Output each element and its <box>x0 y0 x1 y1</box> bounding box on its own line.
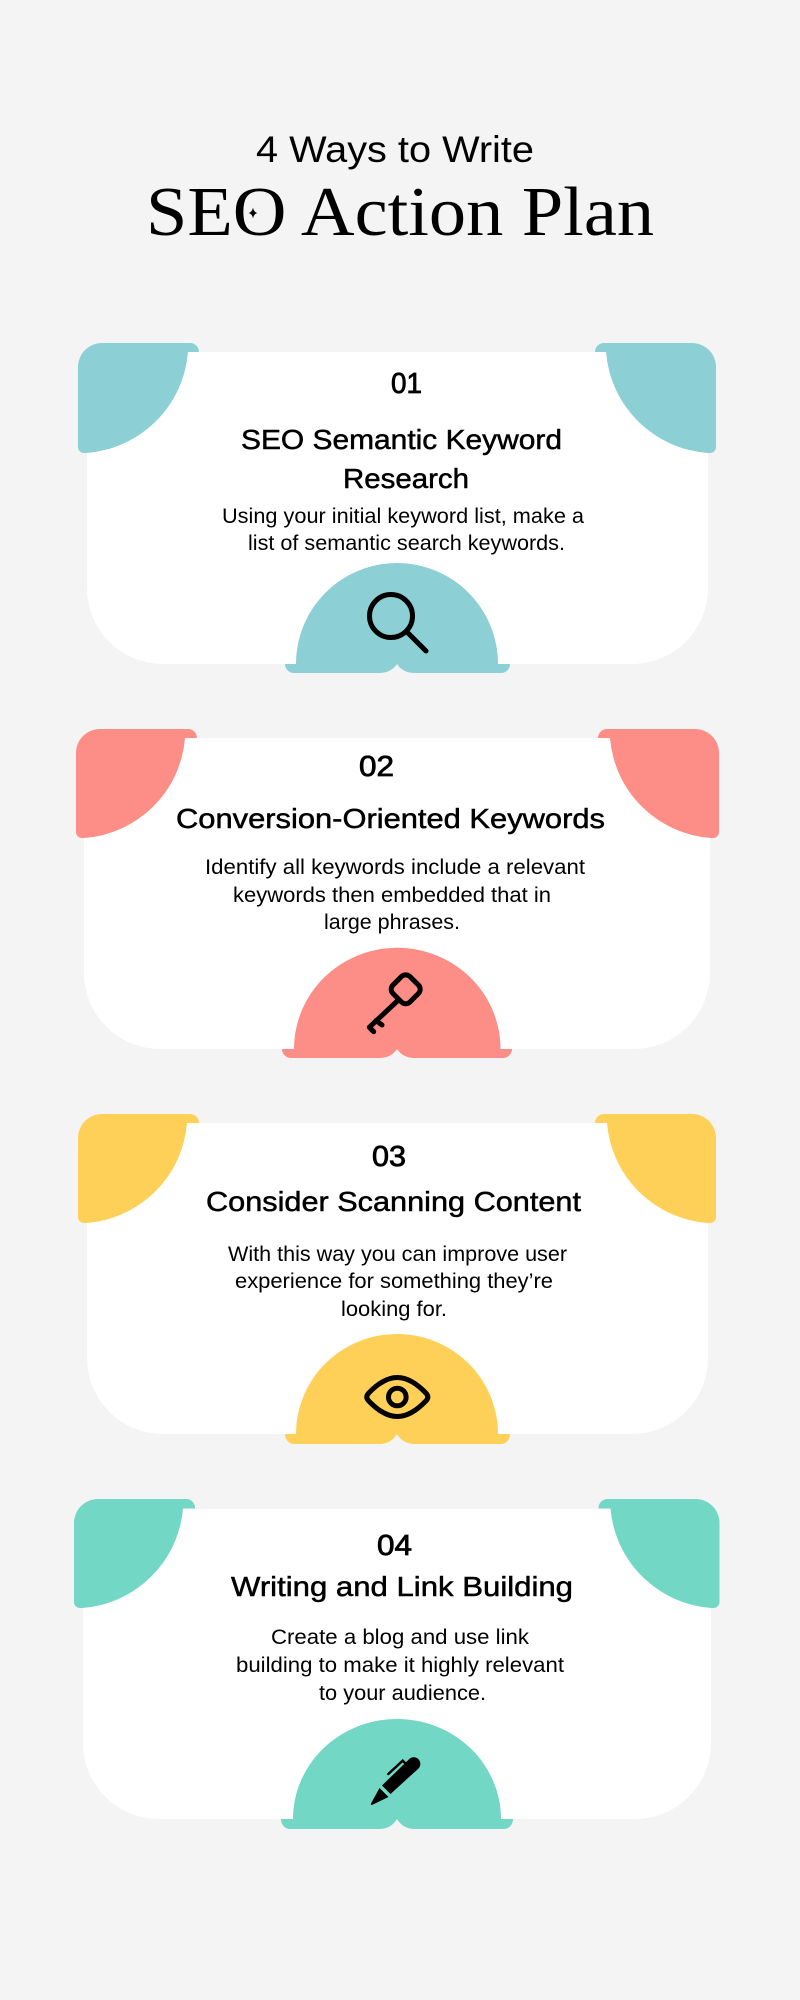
description: looking for. <box>341 1297 447 1321</box>
heading: Research <box>343 463 469 494</box>
icon: eye <box>367 1378 428 1416</box>
icon: sparkle inside the letter O <box>248 208 258 218</box>
description: experience for something they’re <box>235 1269 553 1293</box>
top-left corner accent <box>74 1499 195 1608</box>
card background <box>84 738 710 1049</box>
title block <box>146 129 654 251</box>
semicircle badge <box>282 948 512 1058</box>
description: Using your initial keyword list, make a <box>222 504 584 528</box>
description <box>205 855 585 934</box>
heading: Writing and Link Building <box>231 1571 573 1602</box>
panel: step 02 Conversion-Oriented Keywords <box>76 729 719 1058</box>
heading: SEO Semantic Keyword <box>241 424 562 455</box>
step number: 04 <box>377 1530 412 1562</box>
step number: 02 <box>359 751 394 783</box>
top-left corner accent <box>76 729 197 838</box>
top-right corner accent <box>595 1114 716 1223</box>
description <box>228 1242 567 1321</box>
icon: key <box>369 972 423 1032</box>
panel: step 04 Writing and Link Building <box>74 1499 720 1829</box>
description: With this way you can improve user <box>228 1242 567 1266</box>
main title: SEO Action Plan: SEO Action Plan <box>146 174 654 251</box>
icon: pen <box>371 1757 420 1805</box>
semicircle badge <box>281 1719 513 1829</box>
description: list of semantic search keywords. <box>248 531 565 555</box>
description: building to make it highly relevant <box>236 1653 564 1677</box>
panel: step 03 Consider Scanning Content <box>78 1114 716 1444</box>
panel: step 01 SEO Semantic Keyword Research <box>78 343 716 673</box>
step number: 01 <box>391 368 422 400</box>
description: to your audience. <box>319 1681 486 1705</box>
top-right corner accent <box>598 729 719 838</box>
semicircle badge <box>285 563 510 673</box>
heading <box>241 424 562 494</box>
top-left corner accent <box>78 1114 199 1223</box>
card background <box>83 1509 711 1819</box>
description: large phrases. <box>324 910 460 934</box>
card background <box>87 1123 708 1434</box>
subtitle: 4 Ways to Write: 4 Ways to Write <box>256 129 534 170</box>
description: Create a blog and use link <box>271 1625 529 1649</box>
description <box>222 504 584 555</box>
description <box>236 1625 564 1705</box>
icon: magnifying glass <box>370 594 426 651</box>
semicircle badge <box>285 1334 510 1444</box>
heading: Consider Scanning Content <box>206 1186 581 1217</box>
description: keywords then embedded that in <box>233 883 551 907</box>
step number: 03 <box>372 1141 406 1173</box>
description: Identify all keywords include a relevant <box>205 855 585 879</box>
heading: Conversion-Oriented Keywords <box>176 803 605 834</box>
top-left corner accent <box>78 343 199 453</box>
top-right corner accent <box>595 343 716 453</box>
card background <box>87 352 708 664</box>
top-right corner accent <box>598 1499 720 1608</box>
